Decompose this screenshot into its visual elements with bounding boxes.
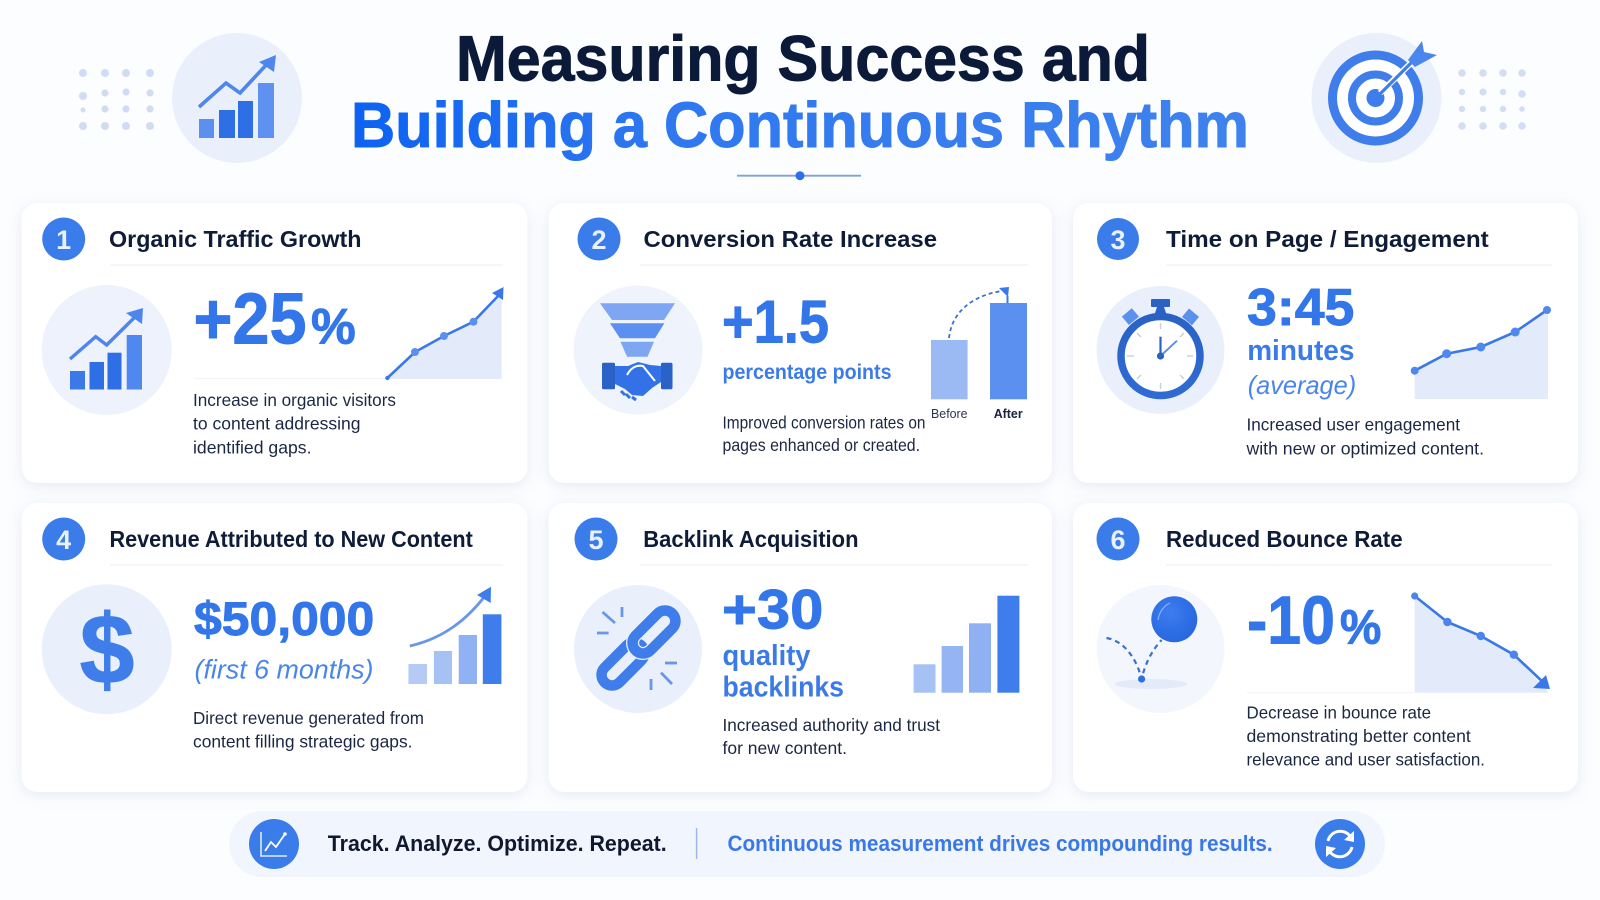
description: Increased user engagement xyxy=(1246,415,1460,435)
area chart xyxy=(1411,306,1551,399)
metric +1.5: +1.5 xyxy=(722,289,829,356)
metric unit: quality xyxy=(722,640,810,672)
description: pages enhanced or created. xyxy=(722,435,920,455)
number badge 5: 5 xyxy=(588,525,604,555)
description xyxy=(1245,415,1484,458)
description: relevance and user satisfaction. xyxy=(1246,749,1485,769)
panel: reduced bounce rate xyxy=(1073,503,1578,792)
icon: chain link xyxy=(574,585,702,713)
description: to content addressing xyxy=(193,414,360,434)
description xyxy=(193,708,424,751)
decorative dots right xyxy=(1458,69,1526,130)
icon: bouncing ball xyxy=(1096,585,1224,713)
metric unit: backlinks xyxy=(722,672,844,704)
metric qualifier: (first 6 months) xyxy=(194,654,374,684)
number badge 6 xyxy=(1096,518,1140,560)
heading: Organic Traffic Growth xyxy=(109,226,362,252)
number badge 4 xyxy=(42,518,85,560)
panel: conversion rate increase xyxy=(548,203,1052,483)
header xyxy=(79,22,1526,180)
title line one: Measuring Success and xyxy=(456,22,1150,94)
icon: growth chart xyxy=(172,33,302,163)
before label: Before xyxy=(931,407,968,421)
card xyxy=(1073,203,1578,483)
decorative dots left xyxy=(79,69,154,130)
description: Increased authority and trust xyxy=(722,715,940,735)
metric 3:45: 3:45 xyxy=(1247,279,1354,337)
metric +30: +30 xyxy=(722,577,823,640)
card xyxy=(22,503,528,792)
icon: dollar sign: $ xyxy=(80,594,134,704)
number badge 2: 2 xyxy=(591,225,607,255)
title line two: Building a Continuous Rhythm xyxy=(351,89,1249,161)
number badge 3: 3 xyxy=(1110,225,1126,255)
description: demonstrating better content xyxy=(1246,726,1471,746)
key message: Continuous measurement drives compounding results. xyxy=(728,831,1273,856)
declining area chart xyxy=(1411,592,1550,693)
description: identified gaps. xyxy=(193,438,312,458)
panel: time on page xyxy=(1073,203,1578,483)
metric +25%: % xyxy=(311,298,356,354)
banner pill xyxy=(229,811,1385,877)
metric qualifier: (average) xyxy=(1248,370,1356,400)
title xyxy=(351,22,1249,161)
description: Increase in organic visitors xyxy=(193,390,396,410)
number badge 6: 6 xyxy=(1110,525,1126,555)
number badge 3 xyxy=(1097,218,1139,260)
description xyxy=(193,390,396,458)
footer banner xyxy=(229,811,1385,877)
area chart with arrow xyxy=(385,287,504,380)
description xyxy=(722,715,940,758)
metric +25%: +25 xyxy=(194,279,306,359)
description: content filling strategic gaps. xyxy=(193,731,412,751)
card xyxy=(548,203,1052,483)
icon: growth chart xyxy=(42,285,172,415)
metric $50,000: $50,000 xyxy=(194,592,374,645)
panel: backlink acquisition xyxy=(548,503,1052,792)
heading: Revenue Attributed to New Content xyxy=(110,526,473,552)
heading: Time on Page / Engagement xyxy=(1166,226,1489,252)
metric -10%: % xyxy=(1340,601,1381,654)
number badge 1: 1 xyxy=(56,225,71,255)
heading: Reduced Bounce Rate xyxy=(1166,526,1403,552)
description: Improved conversion rates on xyxy=(722,412,926,432)
card xyxy=(22,203,528,483)
icon: refresh arrows xyxy=(1315,819,1365,869)
bar chart with arrow xyxy=(408,587,501,684)
description xyxy=(1246,703,1485,769)
description xyxy=(722,412,926,455)
description: for new content. xyxy=(722,738,847,758)
panel: organic traffic growth xyxy=(22,203,528,483)
icon: line chart xyxy=(249,819,299,869)
metric -10%: -10 xyxy=(1247,582,1335,658)
description: Direct revenue generated from xyxy=(193,708,424,728)
icon: stopwatch xyxy=(1096,286,1224,414)
number badge 1 xyxy=(42,218,85,260)
after label: After xyxy=(994,406,1023,421)
card xyxy=(1073,503,1578,792)
heading: Backlink Acquisition xyxy=(643,526,858,552)
before and after bar chart xyxy=(931,287,1027,421)
metric unit: minutes xyxy=(1247,335,1354,367)
icon: target with arrow xyxy=(1312,33,1442,163)
number badge 2 xyxy=(578,218,620,260)
card xyxy=(548,503,1052,792)
metric unit xyxy=(722,640,844,704)
icon: funnel and handshake xyxy=(574,286,702,414)
description: Decrease in bounce rate xyxy=(1246,703,1431,723)
number badge 4: 4 xyxy=(56,525,71,555)
bar chart xyxy=(914,596,1019,693)
description: with new or optimized content. xyxy=(1245,438,1484,458)
panel: revenue attributed xyxy=(22,503,528,792)
metric unit: percentage points xyxy=(722,361,892,384)
heading: Conversion Rate Increase xyxy=(644,226,937,252)
icon: dollar sign xyxy=(42,584,172,714)
tagline: Track. Analyze. Optimize. Repeat. xyxy=(328,831,667,856)
title divider xyxy=(737,171,861,180)
number badge 5 xyxy=(574,518,618,560)
